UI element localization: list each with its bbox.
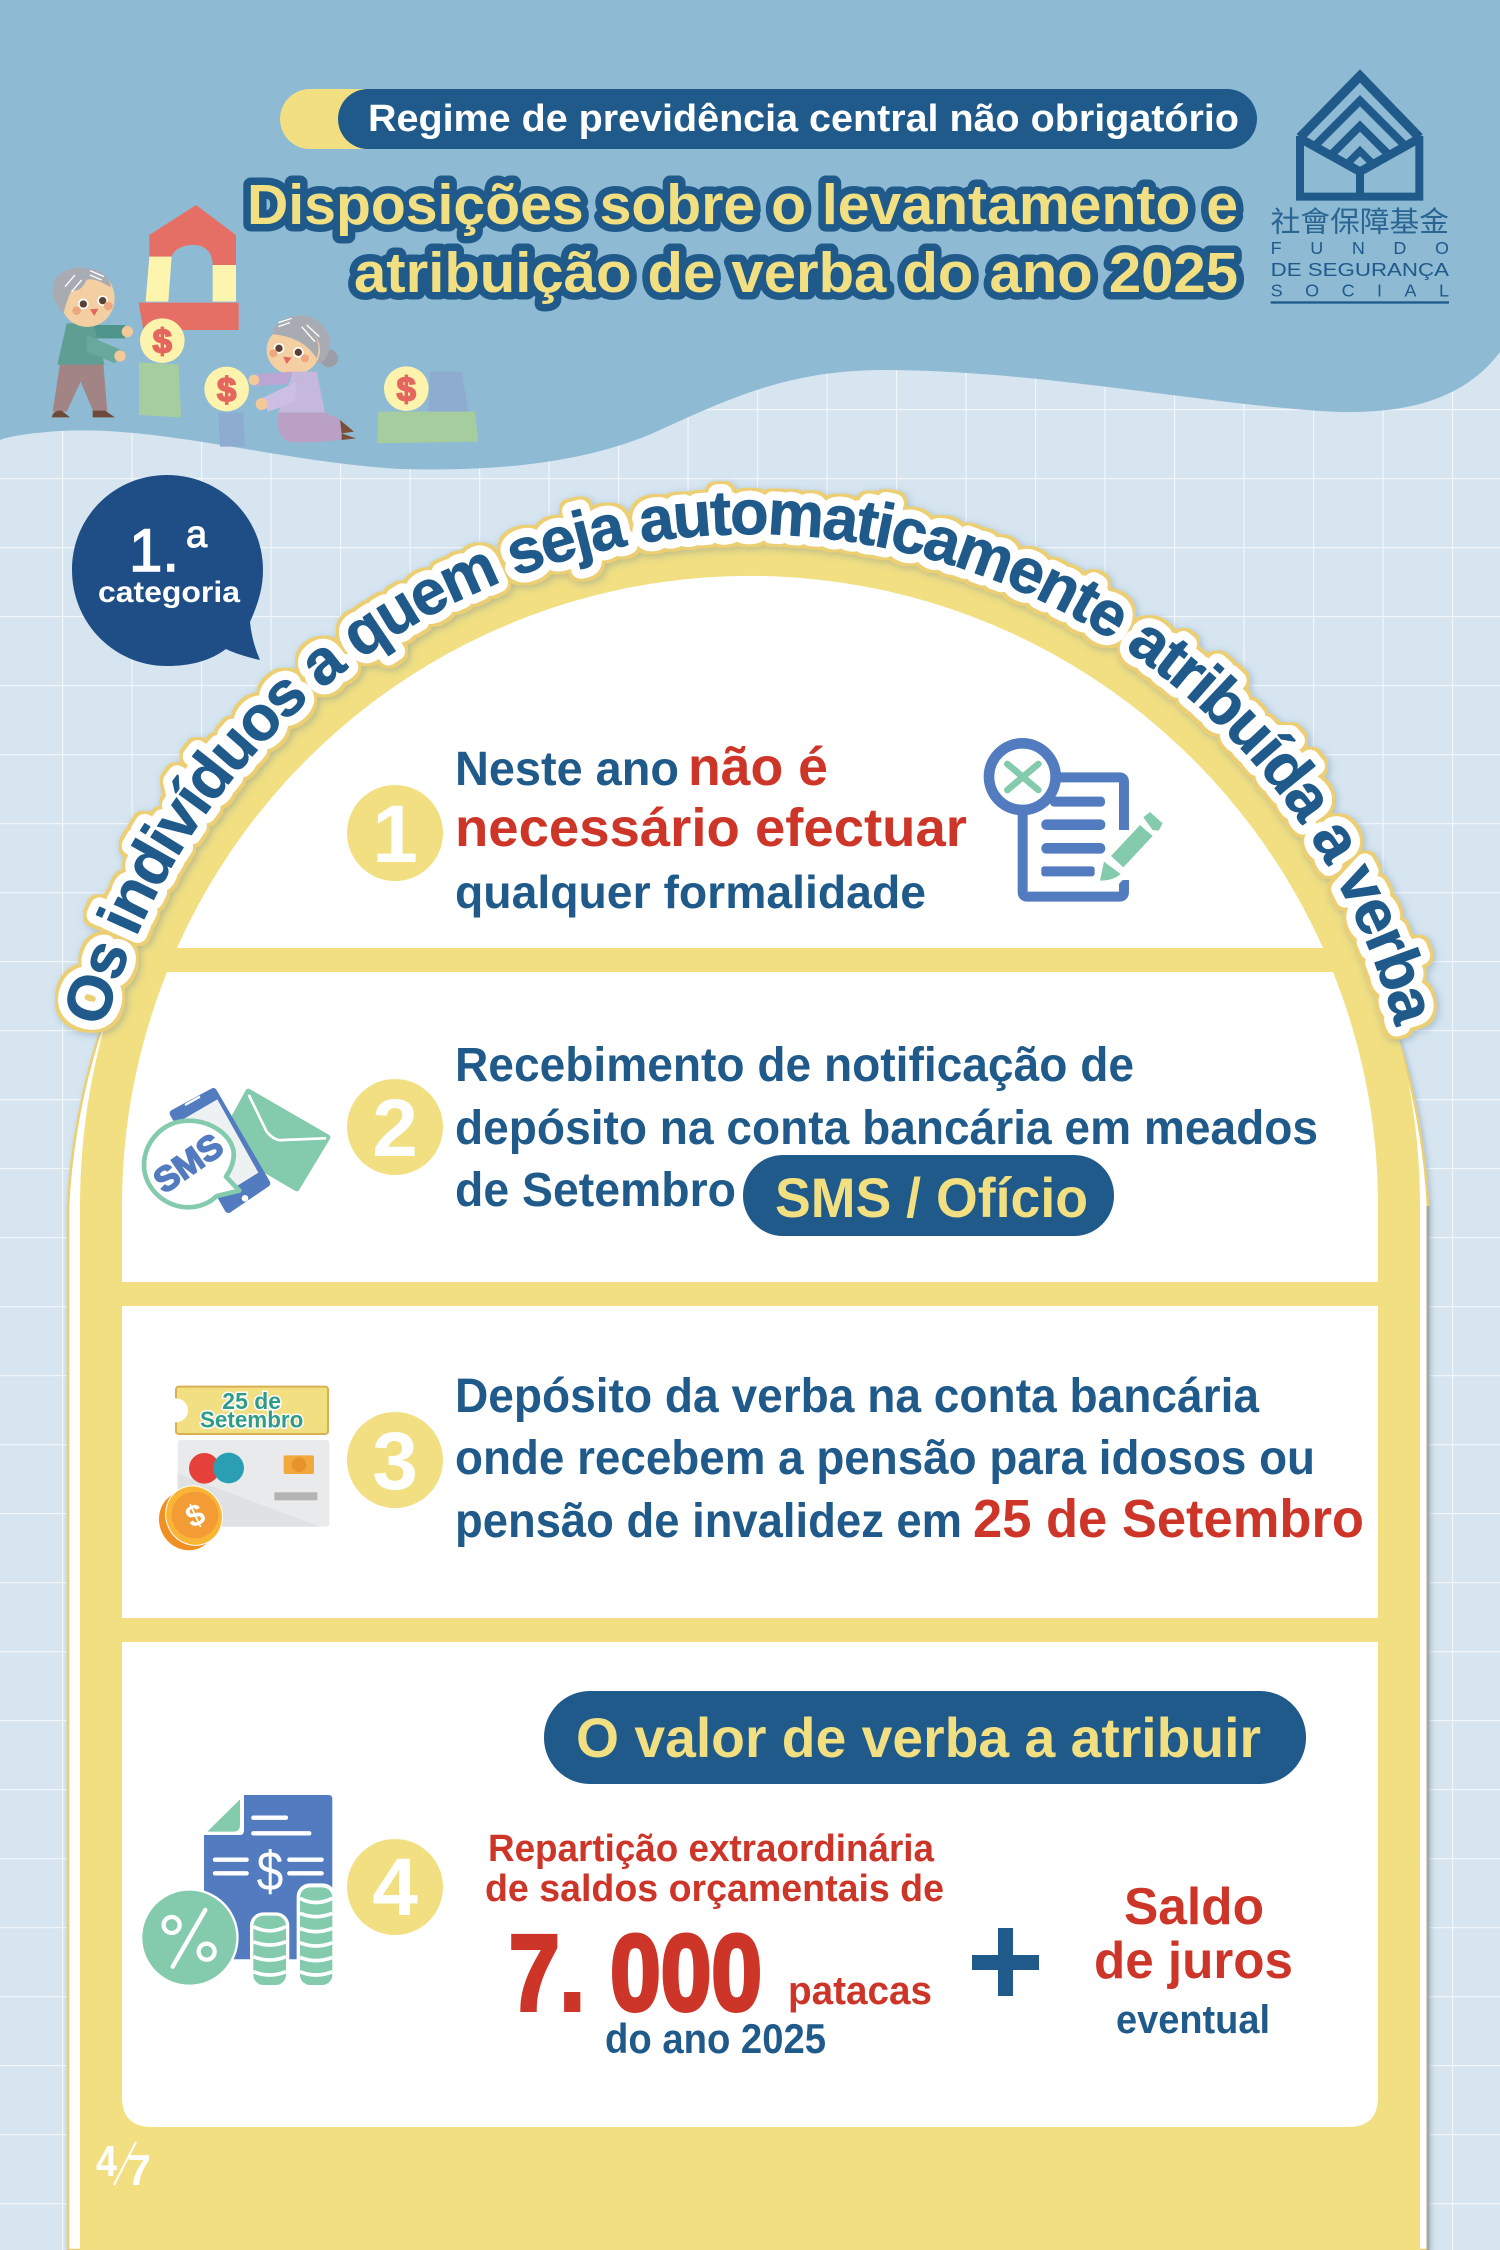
header wave <box>0 0 1500 470</box>
amount block: Repartição extraordinária <box>488 1828 935 1870</box>
illustration: elderly couple stacking blocks and coins: $ <box>397 371 416 409</box>
amount block <box>485 1828 944 2062</box>
category speech bubble <box>72 475 263 666</box>
interest block: Saldo <box>1124 1878 1264 1936</box>
subtitle pill: Regime de previdência central não obrigatório <box>368 98 1239 140</box>
amount block: de saldos orçamentais de <box>485 1868 944 1910</box>
icon: document, percent and coin stacks: $ <box>257 1840 283 1903</box>
page number: 7 <box>127 2146 151 2195</box>
illustration: elderly couple stacking blocks and coins: $ <box>217 371 236 409</box>
step 2 number <box>347 1079 443 1175</box>
icon: SMS phone and envelope <box>144 1092 327 1209</box>
subtitle pill <box>280 89 1257 149</box>
panel 2 background <box>122 972 1378 1282</box>
interest block: eventual <box>1116 1998 1270 2042</box>
step 2 text: de Setembro <box>455 1164 736 1217</box>
value heading pill: O valor de verba a atribuir <box>576 1706 1261 1769</box>
title: atribuição de verba do ano 2025 <box>354 241 1238 305</box>
step 2 text <box>455 1039 1318 1217</box>
plus sign <box>972 1928 1039 1996</box>
step 3 text: 25 de Setembro <box>973 1489 1364 1549</box>
step 3 text: onde recebem a pensão para idosos ou <box>455 1432 1315 1485</box>
curved heading: Os indivíduos a quem seja automaticamente atribuída a verba <box>67 493 1425 1028</box>
step 1 text: necessário efectuar <box>455 798 967 858</box>
title: Disposições sobre o levantamento e <box>247 173 1238 237</box>
step 3 text <box>455 1370 1364 1549</box>
SMS pill <box>743 1155 1114 1236</box>
step 1 text: não é <box>688 737 828 797</box>
icon: document, percent and coin stacks <box>140 1795 336 1987</box>
logo: Fundo de Segurança Social: FUNDO <box>1271 238 1449 258</box>
step 3 text: pensão de invalidez em <box>455 1495 962 1548</box>
arch panel <box>68 534 1428 2250</box>
step 2 text: depósito na conta bancária em meados <box>455 1102 1318 1155</box>
step 4 number <box>347 1839 443 1935</box>
panel 1 background <box>177 576 1323 948</box>
interest block: de juros <box>1094 1932 1293 1990</box>
category speech bubble: 1. <box>129 517 179 584</box>
panel 3 background <box>122 1306 1378 1618</box>
icon: date ticket, bank card and coin: $ <box>180 1497 210 1535</box>
step 3 number: 3 <box>372 1416 418 1507</box>
category speech bubble: a <box>186 514 208 556</box>
title <box>247 173 1238 305</box>
SMS pill: SMS / Ofício <box>775 1166 1088 1229</box>
step 1 text: Neste ano <box>455 743 679 796</box>
category speech bubble: categoria <box>98 576 240 609</box>
page number <box>96 2137 151 2195</box>
icon: date ticket, bank card and coin <box>149 1387 329 1560</box>
step 3 number <box>347 1412 443 1508</box>
page number: 4 <box>96 2137 117 2186</box>
logo: Fundo de Segurança Social: SOCIAL <box>1271 281 1449 301</box>
interest block <box>1094 1878 1293 2042</box>
icon: date ticket, bank card and coin: Setembro <box>200 1406 303 1432</box>
step 1 text <box>455 737 967 918</box>
illustration: elderly couple stacking blocks and coins <box>52 205 478 447</box>
icon: SMS phone and envelope: SMS <box>147 1127 230 1201</box>
logo: Fundo de Segurança Social: DE SEGURANÇA <box>1271 259 1450 280</box>
step 1 text: qualquer formalidade <box>455 866 926 918</box>
illustration: elderly couple stacking blocks and coins: $ <box>153 323 172 361</box>
logo: Fundo de Segurança Social <box>1271 76 1450 304</box>
step 1 number <box>347 785 443 881</box>
icon: date ticket, bank card and coin: 25 de <box>222 1388 281 1414</box>
amount block: 7. 000 <box>509 1912 762 2033</box>
step 1 number: 1 <box>372 789 418 880</box>
panel 4 background <box>122 1642 1378 2127</box>
step 4 number: 4 <box>372 1842 418 1933</box>
step 3 text: Depósito da verba na conta bancária <box>455 1370 1259 1423</box>
logo: Fundo de Segurança Social: 社會保障基金 <box>1271 206 1449 238</box>
amount block: patacas <box>788 1969 932 2013</box>
curved heading: Os indivíduos a quem seja automaticamente atribuída a verba <box>54 480 1442 1046</box>
icon: document with cross and pencil <box>989 743 1173 897</box>
amount block: do ano 2025 <box>605 2015 826 2062</box>
value heading pill <box>544 1691 1306 1784</box>
step 2 number: 2 <box>372 1083 418 1174</box>
step 2 text: Recebimento de notificação de <box>455 1039 1134 1092</box>
